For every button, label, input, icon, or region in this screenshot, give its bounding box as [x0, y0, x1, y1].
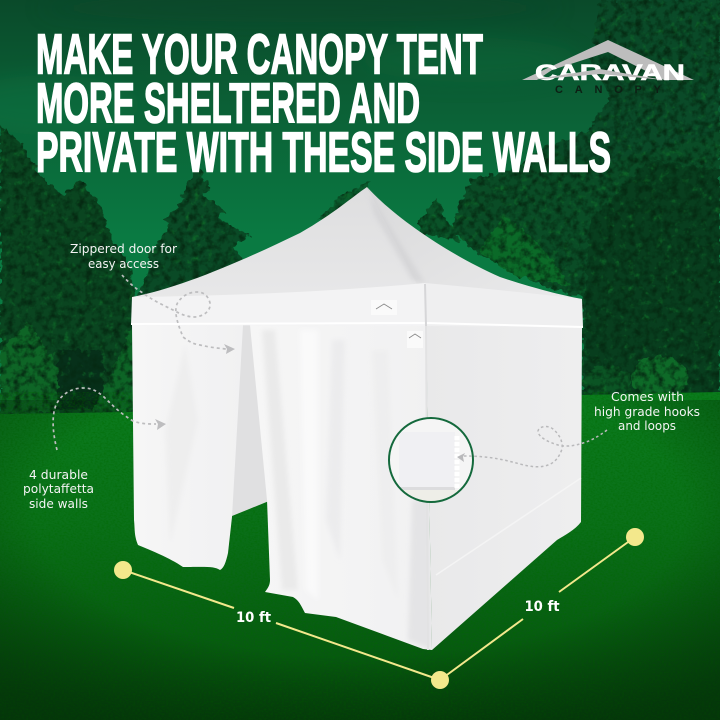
arrow: zippered door	[122, 275, 235, 354]
logo: Caravan Canopy	[522, 40, 694, 96]
central conifer	[135, 165, 256, 300]
dimension lines	[114, 528, 644, 689]
label: hooks and loops	[594, 390, 700, 433]
brand tag on wall	[407, 331, 423, 348]
logo swoosh	[530, 69, 664, 80]
endpoint centre	[431, 671, 449, 689]
left dimension value: 10 ft	[236, 610, 271, 626]
velcro strip	[400, 436, 460, 501]
door interior	[228, 325, 269, 516]
left bush	[0, 322, 66, 415]
right wall seam	[436, 478, 581, 575]
right dark mass	[585, 160, 720, 396]
brand tag on valance	[371, 300, 397, 315]
right dimension value: 10 ft	[524, 599, 560, 615]
roof left face	[132, 187, 430, 302]
left dimension line	[123, 570, 440, 680]
lawn texture	[0, 392, 720, 720]
logo subline: CANOPY	[555, 84, 662, 96]
label: hooks and loops: Comes with	[611, 390, 684, 404]
inset: hook and loop detail	[389, 418, 473, 504]
label: side walls	[23, 468, 94, 511]
lit foliage	[478, 215, 570, 285]
inset background	[389, 418, 473, 502]
right woodland	[450, 130, 720, 396]
roof ridge fold	[369, 192, 425, 283]
top right trees	[540, 0, 720, 240]
valance shadow seam	[425, 284, 426, 326]
bush by tent	[92, 320, 135, 412]
right side wall	[426, 325, 582, 650]
front wall with door flap	[250, 325, 432, 650]
right low bush	[583, 366, 631, 398]
roof right face	[367, 187, 582, 305]
label: hooks and loops: and loops	[618, 419, 676, 433]
label: zippered door: easy access	[88, 257, 159, 271]
inset ring	[389, 418, 473, 502]
arrow: side walls	[53, 388, 166, 450]
label: side walls: polytaffetta	[23, 482, 94, 496]
left woodland	[0, 125, 135, 420]
conifer right of apex	[418, 198, 460, 242]
valance band highlight	[131, 323, 583, 327]
label: hooks and loops: high grade hooks	[594, 405, 700, 419]
title	[36, 22, 611, 184]
valance right	[425, 283, 583, 327]
conifer behind roof	[318, 180, 372, 220]
sky	[0, 0, 720, 430]
fabric folds	[264, 332, 431, 647]
logo wordmark: CARAVAN	[535, 60, 685, 85]
left side wall	[132, 325, 243, 570]
sky clouds	[0, 0, 580, 135]
endpoint right	[626, 528, 644, 546]
label: zippered door	[70, 242, 177, 271]
corner vignette	[0, 400, 720, 720]
lawn	[0, 392, 720, 720]
endpoint left	[114, 561, 132, 579]
tent	[131, 187, 583, 650]
fence	[58, 350, 104, 410]
arrow: hooks and loops	[457, 427, 607, 467]
corner pole seam	[426, 326, 428, 650]
label: zippered door: Zippered door for	[70, 242, 177, 256]
right dimension line	[440, 537, 635, 680]
title: MORE SHELTERED AND	[36, 72, 420, 136]
right bush	[632, 356, 688, 400]
logo roof	[522, 40, 694, 80]
label: side walls: side walls	[29, 497, 88, 511]
label: side walls: 4 durable	[29, 468, 88, 482]
treeline	[0, 0, 720, 420]
valance front	[131, 283, 426, 326]
